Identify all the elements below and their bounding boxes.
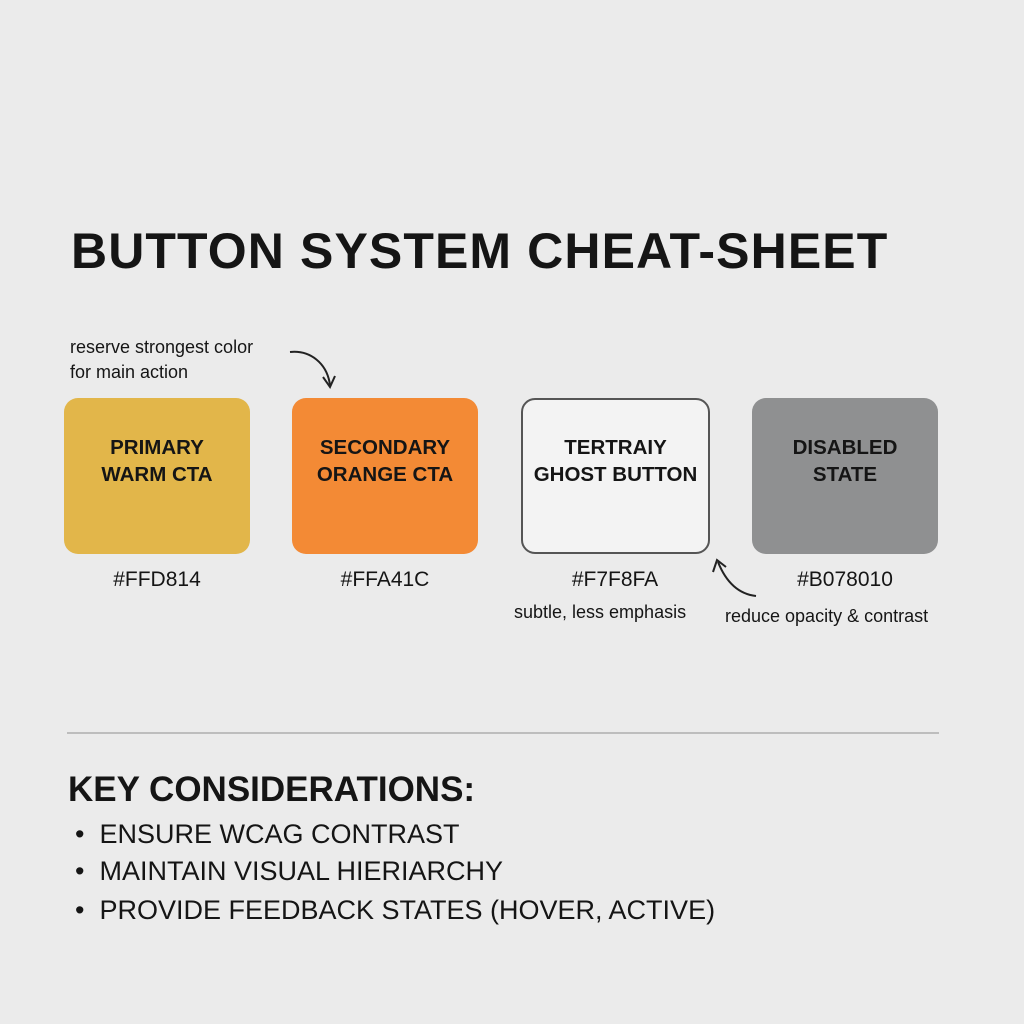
- panel: primary button: PRIMARY: [110, 436, 204, 459]
- panel: tertiary ghost button: GHOST BUTTON: [534, 463, 697, 486]
- panel: secondary button: SECONDARY: [320, 436, 450, 459]
- hex: secondary: #FFA41C: [341, 568, 429, 591]
- panel: secondary button: ORANGE CTA: [317, 463, 453, 486]
- panel: disabled button: STATE: [813, 463, 877, 486]
- panel: primary button: WARM CTA: [101, 463, 213, 486]
- annotation: reduce opacity: reduce opacity & contrast: [725, 606, 928, 626]
- bullet 2: • MAINTAIN VISUAL HIERIARCHY: [75, 856, 503, 886]
- hex: disabled: #B078010: [797, 568, 893, 591]
- panel: tertiary ghost button: TERTRAIY: [564, 436, 667, 459]
- arrow: to secondary: [290, 350, 336, 389]
- bullet 1: • ENSURE WCAG CONTRAST: [75, 819, 459, 849]
- hex: primary: #FFD814: [113, 568, 201, 591]
- bullet 3: • PROVIDE FEEDBACK STATES (HOVER, ACTIVE): [75, 895, 715, 925]
- panel: primary button: [64, 398, 250, 554]
- title: BUTTON SYSTEM CHEAT-SHEET: [71, 223, 888, 279]
- panel: disabled button: [752, 398, 938, 554]
- hex: tertiary: #F7F8FA: [572, 568, 658, 591]
- panel: disabled button: DISABLED: [793, 436, 897, 459]
- annotation: reserve strongest color: reserve strongest color: [70, 337, 253, 357]
- annotation: reserve strongest color: for main action: [70, 362, 188, 382]
- panel: tertiary ghost button: [521, 398, 710, 554]
- arrow: to ghost: [712, 558, 756, 597]
- heading: key considerations: KEY CONSIDERATIONS:: [68, 770, 475, 809]
- annotation: subtle: subtle, less emphasis: [514, 602, 686, 622]
- bullet list: [75, 819, 715, 925]
- panel: secondary button: [292, 398, 478, 554]
- annotation: reserve strongest color: [70, 337, 253, 382]
